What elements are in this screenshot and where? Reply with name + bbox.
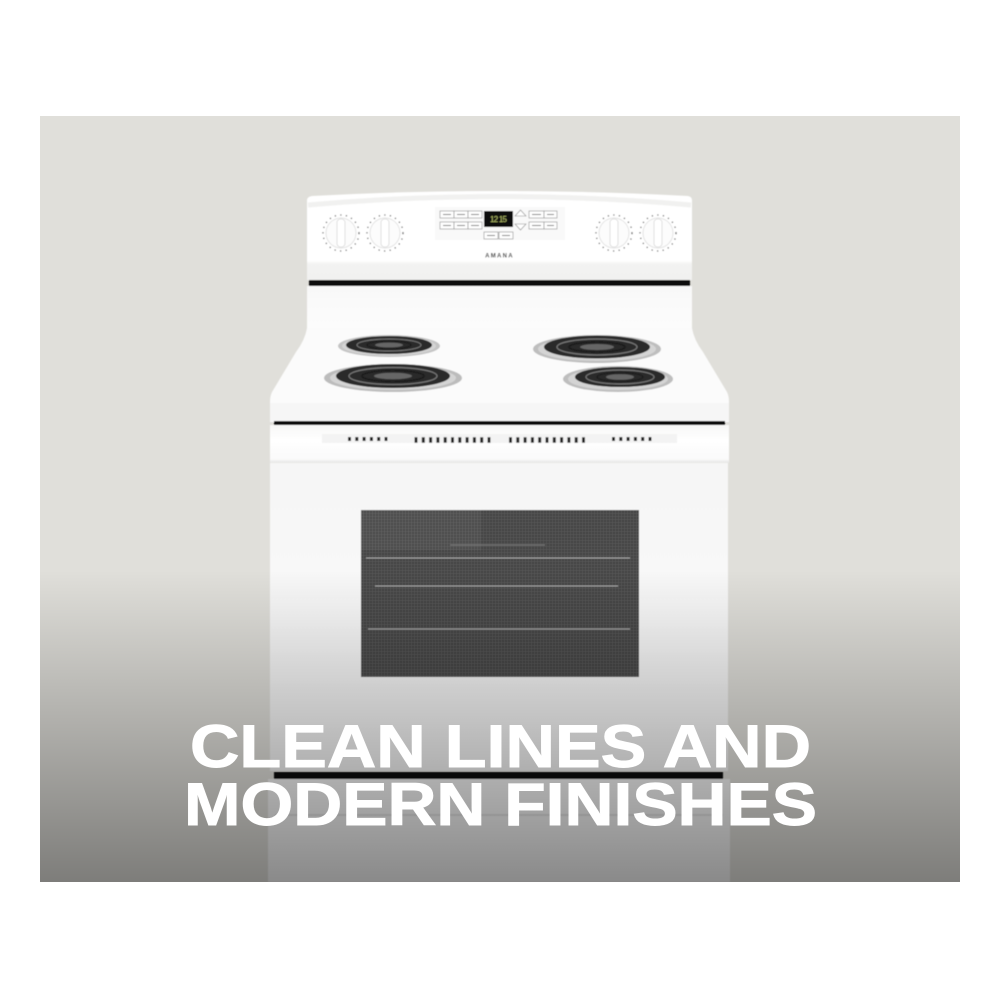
knob: right front — [596, 215, 632, 251]
knob: right rear — [640, 215, 676, 251]
brand name: AMANA — [485, 254, 514, 260]
control panel buttons and clock — [435, 207, 565, 240]
background panel — [40, 116, 960, 882]
oven window — [361, 510, 639, 677]
burner: front right — [563, 366, 673, 392]
title line 2: MODERN FINISHES — [184, 771, 817, 838]
control panel buttons and clock: 12 15 — [490, 215, 508, 224]
oven door — [270, 463, 728, 771]
backguard shadow slot — [309, 280, 690, 286]
burner: front left — [324, 364, 462, 392]
cooktop shadow gap — [274, 421, 725, 425]
riser — [307, 286, 692, 332]
control strip with vents — [270, 425, 729, 463]
illustration: white electric range — [268, 191, 730, 882]
range backguard with controls — [307, 191, 692, 280]
storage drawer — [268, 779, 730, 882]
bottom dark gradient overlay — [40, 570, 960, 882]
lower door gap — [274, 772, 723, 779]
title — [184, 713, 817, 838]
burner: rear right — [533, 335, 661, 363]
knob: left front — [367, 215, 403, 251]
burner: rear left — [338, 335, 440, 357]
title line 1: CLEAN LINES AND — [190, 713, 811, 780]
cooktop — [270, 328, 729, 422]
knob: left rear — [323, 215, 359, 251]
